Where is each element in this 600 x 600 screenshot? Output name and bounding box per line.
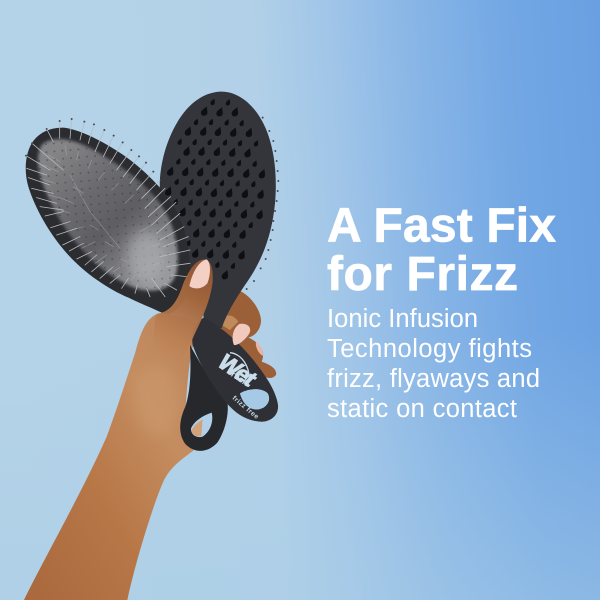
headline: for Frizz — [327, 248, 518, 301]
pin tips — [25, 118, 154, 173]
body text: Technology fights — [327, 335, 532, 363]
drop holes — [165, 99, 265, 279]
brush with drop-shaped holes — [160, 92, 279, 328]
thumb and fingertips — [154, 259, 263, 370]
body text: static on contact — [327, 395, 517, 423]
cushion — [38, 139, 178, 290]
label: frizz free: frizz free — [231, 395, 260, 421]
lower handle with loop — [180, 345, 228, 451]
fingers behind handle — [218, 289, 276, 378]
photo: hand holding two brushes — [24, 92, 279, 600]
logo: Wet brush: Wet — [212, 350, 263, 391]
metal pins — [26, 119, 190, 297]
body text: frizz, flyaways and — [327, 365, 540, 393]
logo: Wet brush — [212, 350, 263, 421]
body text: Ionic Infusion — [327, 305, 478, 333]
headline — [327, 200, 556, 301]
bristle tips along right edge — [246, 117, 279, 290]
body text — [327, 305, 540, 423]
bristle brush head — [25, 118, 191, 315]
logo: Wet brush: brush — [225, 366, 250, 388]
headline: A Fast Fix — [327, 200, 556, 252]
upper handle with logo — [192, 318, 278, 422]
light band on cushion — [127, 230, 167, 283]
arm and palm — [24, 313, 200, 600]
